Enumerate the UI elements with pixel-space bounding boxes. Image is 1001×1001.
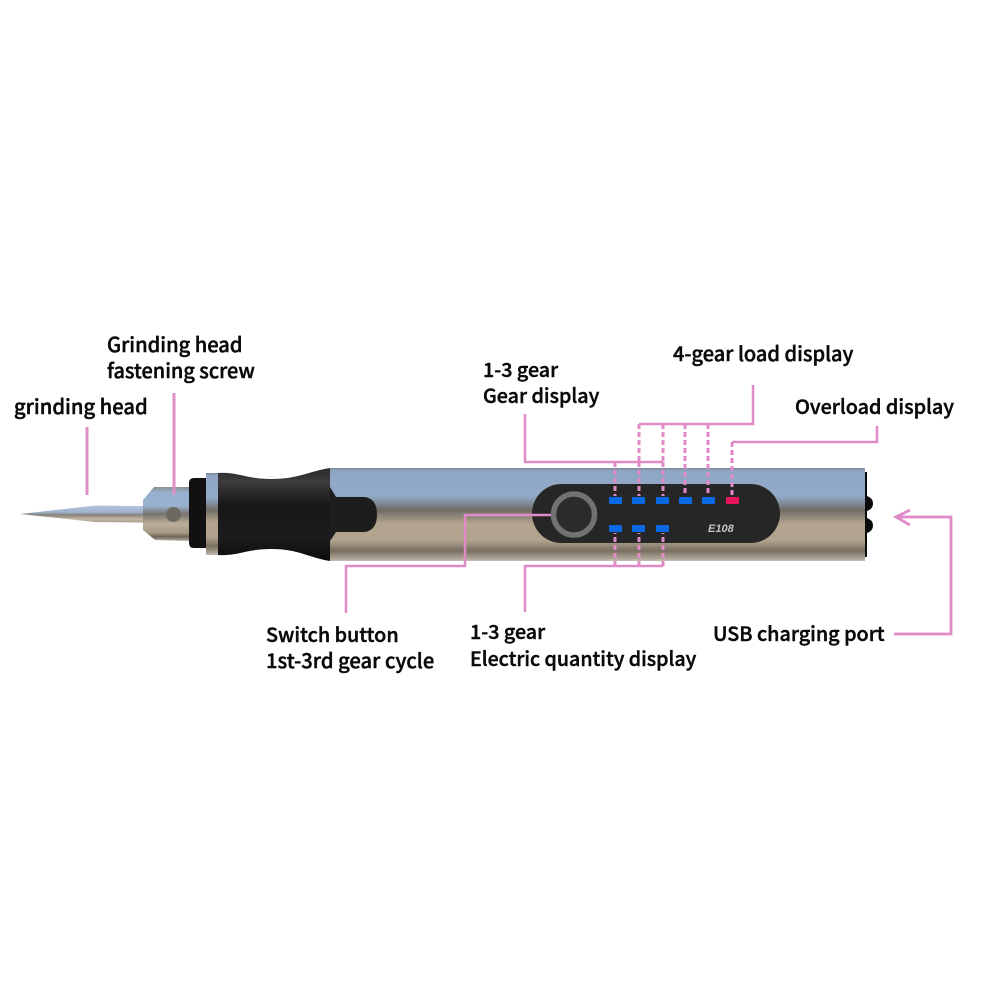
- leader: overload display: [732, 426, 877, 496]
- label: gear display: 1-3 gear: [483, 354, 559, 383]
- leader: grinding head: [86, 427, 88, 495]
- arrow: USB charging port: [894, 510, 951, 634]
- label: electric quantity display: Electric quantity display: [470, 643, 697, 672]
- rotary tool: [20, 468, 873, 561]
- label: gear display: Gear display: [483, 380, 600, 409]
- bottom LED row: [609, 525, 669, 532]
- fastening screw: [166, 507, 181, 522]
- end cap: [865, 472, 873, 557]
- control panel: [532, 484, 780, 543]
- grinding needle: [20, 506, 143, 522]
- label: switch button: 1st-3rd gear cycle: [266, 645, 434, 674]
- switch button: [554, 494, 594, 535]
- leader: 4-gear load display: [639, 385, 753, 496]
- label: fastening screw: fastening screw: [107, 355, 255, 384]
- leader: gear display: [525, 414, 663, 496]
- label: grinding head: grinding head: [14, 391, 148, 420]
- leader: fastening screw: [172, 393, 176, 495]
- leader: switch button: [346, 515, 551, 613]
- rubber grip: [218, 468, 330, 561]
- collar: [143, 487, 190, 541]
- label: fastening screw: Grinding head: [107, 329, 243, 358]
- label: overload display: Overload display: [795, 391, 954, 420]
- label: switch button: Switch button: [266, 619, 399, 648]
- top LED row: [609, 497, 739, 504]
- body slot: [330, 487, 377, 541]
- leader: electric quantity display: [525, 533, 663, 612]
- model label: E108: [708, 523, 735, 535]
- label: USB charging port: USB charging port: [713, 618, 885, 647]
- metal body: [330, 468, 865, 561]
- silver ring: [206, 473, 219, 555]
- black ring: [189, 478, 207, 548]
- label: electric quantity display: 1-3 gear: [470, 616, 546, 645]
- label: 4-gear load display: 4-gear load display: [673, 338, 854, 367]
